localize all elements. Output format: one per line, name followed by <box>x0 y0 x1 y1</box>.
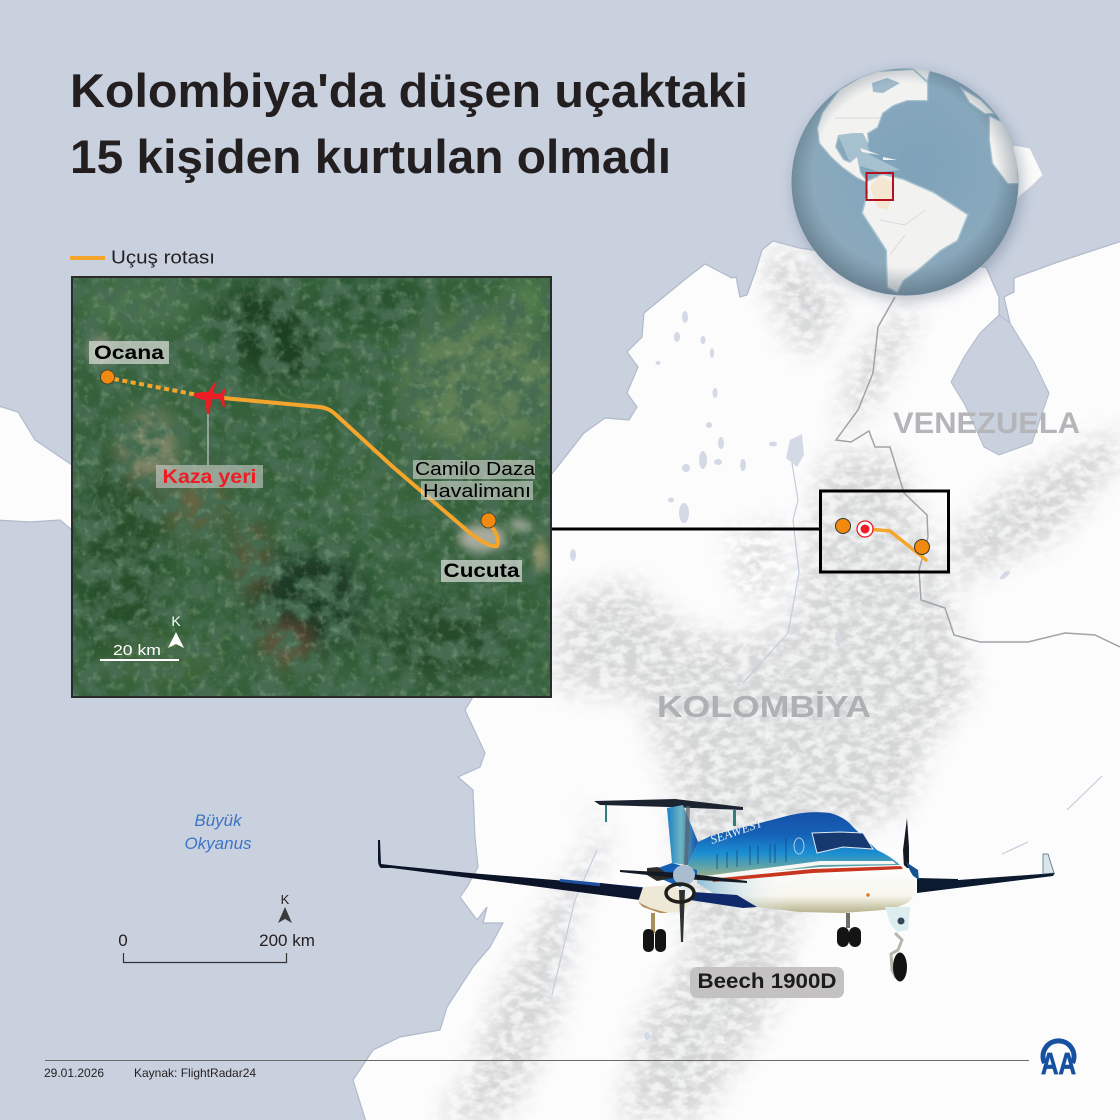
point: Camilo Daza airport <box>481 513 496 528</box>
South America <box>863 175 967 292</box>
locator box on main map <box>820 491 948 572</box>
cheatline red <box>711 866 903 882</box>
ocean label: Büyük <box>194 811 242 830</box>
nose gear <box>891 933 907 982</box>
label: Cucuta: Cucuta <box>444 561 520 582</box>
country label: Venezuela: VENEZUELA <box>893 407 1080 440</box>
winglet right <box>1043 854 1054 874</box>
left landing gear <box>643 913 666 952</box>
cheatline white <box>705 861 896 880</box>
footer source: Kaynak: FlightRadar24 <box>134 1066 256 1080</box>
land behind globe <box>1013 145 1043 205</box>
north arrow <box>168 613 184 648</box>
ocean label: Okyanus <box>184 834 252 853</box>
nose gear door <box>885 907 910 932</box>
point <box>914 540 930 554</box>
scale bar: 20 km <box>113 642 161 659</box>
propeller blades <box>620 865 747 942</box>
lakes <box>570 311 1011 1040</box>
rivers <box>552 463 1102 995</box>
title: 15 kişiden kurtulan olmadı <box>70 130 671 183</box>
label: Ocana <box>89 341 169 364</box>
Africa and Europe edge <box>913 68 1018 183</box>
route in locator <box>868 529 926 560</box>
lake Maracaibo <box>951 315 1049 455</box>
north arrow: main map: K <box>281 892 290 907</box>
nose gear door hub <box>898 918 904 924</box>
title: Kolombiya'da düşen uçaktaki <box>70 64 748 117</box>
panel: satellite inset map <box>72 271 560 697</box>
fuselage rear tint <box>697 870 790 911</box>
country boundaries <box>835 118 925 255</box>
distance scale <box>118 931 315 962</box>
Colombia highlight <box>870 175 893 210</box>
aircraft model label: Beech 1900D <box>698 970 836 993</box>
point <box>836 518 850 534</box>
fuselage white lower <box>697 862 915 913</box>
label: Ocana: Ocana <box>94 343 165 364</box>
aircraft model label <box>690 967 844 998</box>
near wing root <box>690 892 757 908</box>
leader line <box>207 408 209 465</box>
country label: Kolombiya: KOLOMBİYA <box>657 689 871 724</box>
connector line <box>551 528 820 530</box>
engine blue cowl <box>657 863 697 887</box>
point: Ocana <box>100 370 114 384</box>
blue spinner right <box>906 862 919 880</box>
label: airport <box>413 459 536 501</box>
fuselage blue upper <box>688 812 900 878</box>
horizontal stabiliser <box>594 799 743 810</box>
right wing <box>917 873 1055 893</box>
engine lower tint <box>638 902 668 913</box>
distance scale: 200 km <box>259 931 315 950</box>
title <box>70 64 748 183</box>
fuselage text: SEAWEST <box>708 816 765 847</box>
footer rule <box>45 1060 1029 1062</box>
locator globe <box>792 68 1022 300</box>
label: crash site: Kaza yeri <box>162 467 256 488</box>
footer date: 29.01.2026 <box>44 1066 104 1080</box>
label: airport: Havalimanı <box>423 481 531 501</box>
logo: Anadolu Agency: AA <box>1041 1046 1076 1081</box>
north arrow: K <box>171 613 181 629</box>
Hudson Bay <box>872 78 900 93</box>
Caribbean islands <box>860 148 897 160</box>
flight route dotted <box>114 379 198 395</box>
right propeller <box>903 818 909 868</box>
windshield <box>812 832 873 853</box>
icon: crashed plane <box>193 382 226 414</box>
side window <box>794 838 804 854</box>
shelf shading <box>838 133 900 172</box>
label: airport: Camilo Daza <box>415 459 536 479</box>
distance scale: 0 <box>118 931 128 950</box>
map: land masses of Colombia and Venezuela <box>0 240 1120 1120</box>
exhaust dark <box>647 867 673 881</box>
tail fin <box>667 805 698 865</box>
scale bar <box>100 642 179 660</box>
photo: Beech 1900D aircraft <box>378 799 1055 982</box>
cabin door lines and windows <box>717 838 786 869</box>
soft relief shading <box>437 250 1120 1120</box>
nose details <box>866 893 870 897</box>
locator square <box>866 173 893 200</box>
legend: flight route: Uçuş rotası <box>111 248 215 268</box>
wing leading edge <box>560 879 652 892</box>
left wing root <box>600 883 652 898</box>
left engine <box>638 885 693 913</box>
North America <box>818 70 927 182</box>
country borders <box>836 297 1120 647</box>
stabiliser fins <box>605 805 736 826</box>
north arrow: main map <box>278 892 292 923</box>
belly gear <box>837 913 861 947</box>
relief texture <box>437 250 1120 1120</box>
far tail fin tip <box>684 806 690 865</box>
crash marker <box>857 521 873 537</box>
flight route solid <box>223 398 498 546</box>
left wing <box>378 840 653 900</box>
